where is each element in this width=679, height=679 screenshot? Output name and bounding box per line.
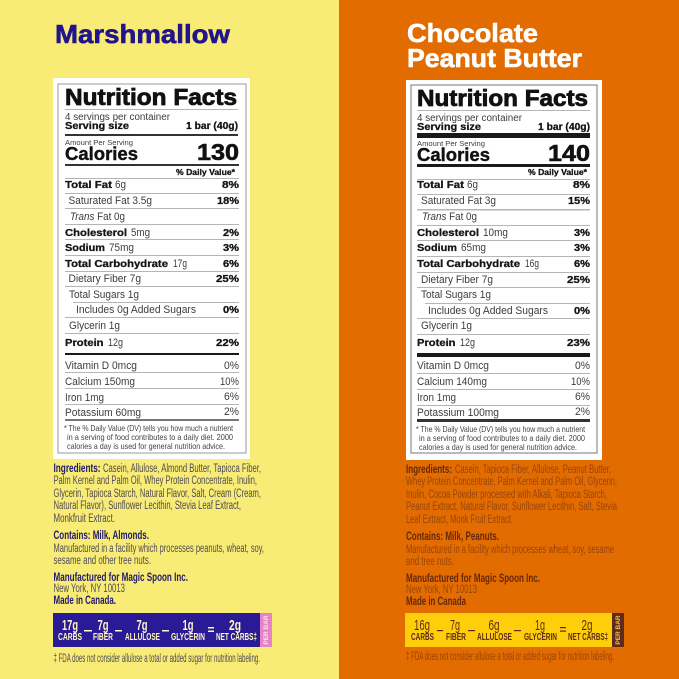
row: calcium: Calcium 150mg — [65, 376, 135, 388]
row: total fat: 8% — [573, 179, 591, 191]
daily value header: % Daily Value* — [176, 168, 236, 177]
net carbs bar: 16g — [414, 617, 430, 634]
ingredients: Natural Flavor), Sunflower Lecithin, Stevia Leaf Extract, — [54, 500, 241, 512]
manufacturer: New York, NY 10013 — [54, 583, 125, 595]
calories: Calories — [417, 145, 490, 165]
row: dietary fiber: Dietary Fiber 7g — [421, 274, 493, 286]
row: total carbohydrate: 6% — [574, 258, 591, 270]
net carbs bar: CARBS — [58, 632, 82, 643]
allergens: Manufactured in a facility which processes peanuts, wheat, soy, — [54, 543, 264, 555]
allergens — [54, 530, 264, 567]
net carbs bar: 17g — [62, 617, 78, 634]
footnote: daily value — [416, 424, 586, 452]
row: protein: 23% — [567, 337, 591, 349]
net carbs bar — [53, 613, 272, 647]
ingredients — [406, 464, 617, 526]
servings — [65, 112, 238, 132]
row: dietary fiber — [68, 273, 240, 285]
row: iron — [65, 391, 239, 404]
row: protein: 22% — [216, 337, 240, 349]
row: protein: 12g — [108, 337, 123, 349]
heading: Chocolate Peanut Butter: Peanut Butter — [407, 43, 582, 73]
row: dietary fiber: 25% — [567, 274, 591, 286]
row: calcium — [417, 376, 590, 388]
row: vitamin d: Vitamin D 0mcg — [65, 360, 137, 372]
row: cholesterol: 2% — [223, 227, 240, 239]
row: potassium: 2% — [224, 406, 239, 418]
row: iron: Iron 1mg — [65, 392, 104, 404]
manufacturer: Manufactured for Magic Spoon Inc. — [406, 573, 540, 585]
row: total fat: 6g — [467, 179, 478, 191]
net carbs bar — [405, 613, 624, 647]
servings — [417, 113, 590, 133]
row: potassium — [65, 406, 239, 419]
row: sodium: 75mg — [109, 242, 134, 254]
row: added sugars: Includes 0g Added Sugars — [428, 305, 548, 317]
ingredients: Glycerin, Tapioca Starch, Natural Flavor, Salt, Cream (Cream, — [54, 488, 261, 500]
row: cholesterol: 5mg — [131, 227, 150, 239]
net carbs bar: 1g — [535, 617, 545, 634]
heading: Chocolate Peanut Butter: Chocolate — [407, 18, 538, 48]
net carbs bar: 7g — [136, 617, 148, 634]
row: vitamin d — [65, 360, 239, 372]
manufacturer — [406, 573, 540, 608]
row: sodium: Sodium — [65, 242, 105, 254]
row: glycerin: Glycerin 1g — [69, 320, 120, 332]
net carbs bar: FIBER — [93, 632, 114, 643]
net carbs bar: NET CARBS‡ — [216, 632, 257, 643]
calories: Amount Per Serving — [417, 139, 485, 148]
row: dietary fiber: Dietary Fiber 7g — [68, 273, 141, 285]
net carbs bar: PER BAR — [615, 615, 622, 645]
ingredients: Leaf Extract, Monk Fruit Extract. — [406, 514, 513, 526]
allergens: and tree nuts. — [406, 556, 454, 568]
allergens: sesame and other tree nuts. — [54, 555, 151, 567]
row: cholesterol: Cholesterol — [65, 227, 127, 239]
row: sodium: 3% — [574, 242, 591, 254]
footnote: daily value: in a serving of food contributes to a daily diet. 2000 — [419, 433, 585, 443]
net carbs bar: 1g — [182, 617, 194, 634]
calories: Calories — [65, 144, 138, 164]
manufacturer: Made in Canada — [406, 596, 466, 608]
footnote: daily value: * The % Daily Value (DV) tells you how much a nutrient — [416, 424, 586, 434]
row: vitamin d — [417, 360, 590, 372]
row: cholesterol: 3% — [574, 227, 591, 239]
ingredients: Ingredients: — [54, 463, 100, 475]
row: calcium: 10% — [571, 376, 590, 388]
ingredients: Ingredients: — [406, 464, 452, 476]
row: vitamin d: 0% — [224, 360, 239, 372]
row: saturated fat: Saturated Fat 3.5g — [68, 195, 152, 207]
ingredients: Palm Kernel and Palm Oil, Whey Protein Concentrate, Inulin, — [54, 475, 257, 487]
row: protein: Protein — [417, 337, 456, 349]
servings: Serving size — [65, 120, 129, 132]
panel: chocolate peanut butter — [339, 0, 679, 679]
row: potassium: 2% — [575, 406, 590, 418]
calories — [65, 138, 239, 165]
allergens: Contains: Milk, Peanuts. — [406, 531, 499, 543]
net carbs bar: 2g — [229, 617, 241, 634]
row: total carbohydrate: 17g — [173, 258, 187, 270]
title: Nutrition Facts: Nutrition Facts — [417, 85, 588, 111]
net carbs bar: GLYCERIN — [524, 632, 557, 643]
title: Nutrition Facts: Nutrition Facts — [65, 84, 237, 110]
net carbs bar: ALLULOSE — [125, 632, 160, 643]
footnote: daily value: in a serving of food contributes to a daily diet. 2000 — [67, 432, 233, 442]
row: saturated fat — [68, 195, 240, 207]
row: protein: 12g — [460, 337, 475, 349]
nutrition facts card: chocolate peanut butter — [406, 80, 602, 460]
row: saturated fat: Saturated Fat 3g — [421, 195, 496, 207]
manufacturer: Manufactured for Magic Spoon Inc. — [54, 572, 188, 584]
row: calcium: Calcium 140mg — [417, 376, 487, 388]
row: cholesterol — [417, 227, 591, 239]
row: calcium: 10% — [220, 376, 239, 388]
row: iron — [417, 391, 590, 404]
net carbs bar: GLYCERIN — [171, 632, 205, 643]
row: vitamin d: Vitamin D 0mcg — [417, 360, 489, 372]
row: total fat — [417, 179, 591, 191]
row: added sugars: 0% — [223, 304, 240, 316]
row: dietary fiber — [421, 274, 591, 286]
manufacturer: Made in Canada. — [54, 595, 116, 607]
servings: 4 servings per container — [65, 112, 171, 123]
row: cholesterol — [65, 227, 240, 239]
allergens — [406, 531, 614, 568]
row: saturated fat: 15% — [568, 195, 591, 207]
manufacturer: New York, NY 10013 — [406, 584, 477, 596]
row: added sugars: Includes 0g Added Sugars — [76, 304, 196, 316]
calories: Amount Per Serving — [65, 138, 133, 147]
row: glycerin: Glycerin 1g — [421, 320, 472, 332]
nutrition facts card: marshmallow — [53, 78, 250, 459]
net carbs bar: FIBER — [446, 632, 467, 643]
row: total fat — [65, 179, 240, 191]
row: potassium: Potassium 60mg — [65, 407, 141, 419]
row: trans fat: Trans Fat 0g — [70, 211, 125, 223]
row: dietary fiber: 25% — [216, 273, 240, 285]
net carbs bar: PER BAR — [263, 615, 270, 645]
servings: 4 servings per container — [417, 113, 523, 124]
row: total fat: 8% — [222, 179, 240, 191]
row: total fat: Total Fat — [417, 179, 465, 191]
row: total carbohydrate — [65, 258, 240, 270]
row: total carbohydrate: 6% — [223, 258, 240, 270]
row: sodium — [417, 242, 591, 254]
row: iron: 6% — [224, 391, 239, 403]
net carbs bar: 7g — [450, 617, 460, 634]
daily value header: % Daily Value* — [528, 168, 588, 177]
net carbs bar: CARBS — [411, 632, 434, 643]
net carbs bar: NET CARBS‡ — [568, 632, 608, 643]
row: trans fat: Trans Fat 0g — [422, 211, 477, 223]
row: saturated fat: 18% — [217, 195, 240, 207]
row: protein: Protein — [65, 337, 104, 349]
net carbs bar: ALLULOSE — [477, 632, 512, 643]
ingredients — [54, 463, 261, 525]
row: potassium: Potassium 100mg — [417, 407, 499, 419]
footnote: daily value: * The % Daily Value (DV) tells you how much a nutrient — [64, 423, 234, 433]
row: total fat: Total Fat — [65, 179, 113, 191]
row: sodium: 3% — [223, 242, 240, 254]
row: vitamin d: 0% — [575, 360, 590, 372]
row: total carbohydrate: Total Carbohydrate — [65, 258, 168, 270]
row: sodium: Sodium — [417, 242, 457, 254]
row: iron: Iron 1mg — [417, 392, 456, 404]
row: total carbohydrate — [417, 258, 591, 270]
calories: 130 — [197, 139, 239, 165]
row: total sugars: Total Sugars 1g — [421, 289, 491, 301]
row: total carbohydrate: Total Carbohydrate — [417, 258, 520, 270]
row: total carbohydrate: 16g — [525, 258, 539, 270]
calories — [417, 139, 590, 166]
heading: Marshmallow: Marshmallow — [55, 19, 231, 49]
servings: 1 bar (40g) — [186, 120, 238, 132]
net carbs bar: 6g — [488, 617, 500, 634]
row: added sugars: 0% — [574, 305, 591, 317]
net carbs bar: 7g — [98, 617, 108, 634]
row: iron: 6% — [575, 391, 590, 403]
net carbs bar: 2g — [582, 617, 592, 634]
servings: 1 bar (40g) — [538, 121, 590, 133]
ingredients: Monkfruit Extract. — [54, 513, 115, 525]
footnote: daily value: calories a day is used for general nutrition advice. — [419, 442, 577, 452]
footnote: allulose: ‡ FDA does not consider allulose a total or added sugar for nutrition labeling. — [54, 653, 260, 665]
row: saturated fat — [421, 195, 591, 207]
footnote: daily value — [64, 423, 234, 451]
row: cholesterol: Cholesterol — [417, 227, 479, 239]
row: calcium — [65, 376, 239, 388]
servings: Serving size — [417, 121, 481, 133]
row: total fat: 6g — [115, 179, 126, 191]
panel: marshmallow — [0, 0, 339, 679]
ingredients: Casein, Allulose, Almond Butter, Tapioca Fiber, — [103, 463, 261, 475]
manufacturer — [54, 572, 188, 607]
row: protein — [65, 337, 240, 349]
calories: 140 — [548, 140, 590, 166]
row: potassium — [417, 406, 590, 419]
heading: Chocolate Peanut Butter — [407, 18, 582, 73]
row: protein — [417, 337, 591, 349]
allergens: Contains: Milk, Almonds. — [54, 530, 149, 542]
row: cholesterol: 10mg — [483, 227, 508, 239]
row: sodium: 65mg — [461, 242, 486, 254]
row: total sugars: Total Sugars 1g — [69, 289, 139, 301]
row: sodium — [65, 242, 240, 254]
footnote: daily value: calories a day is used for general nutrition advice. — [67, 441, 225, 451]
